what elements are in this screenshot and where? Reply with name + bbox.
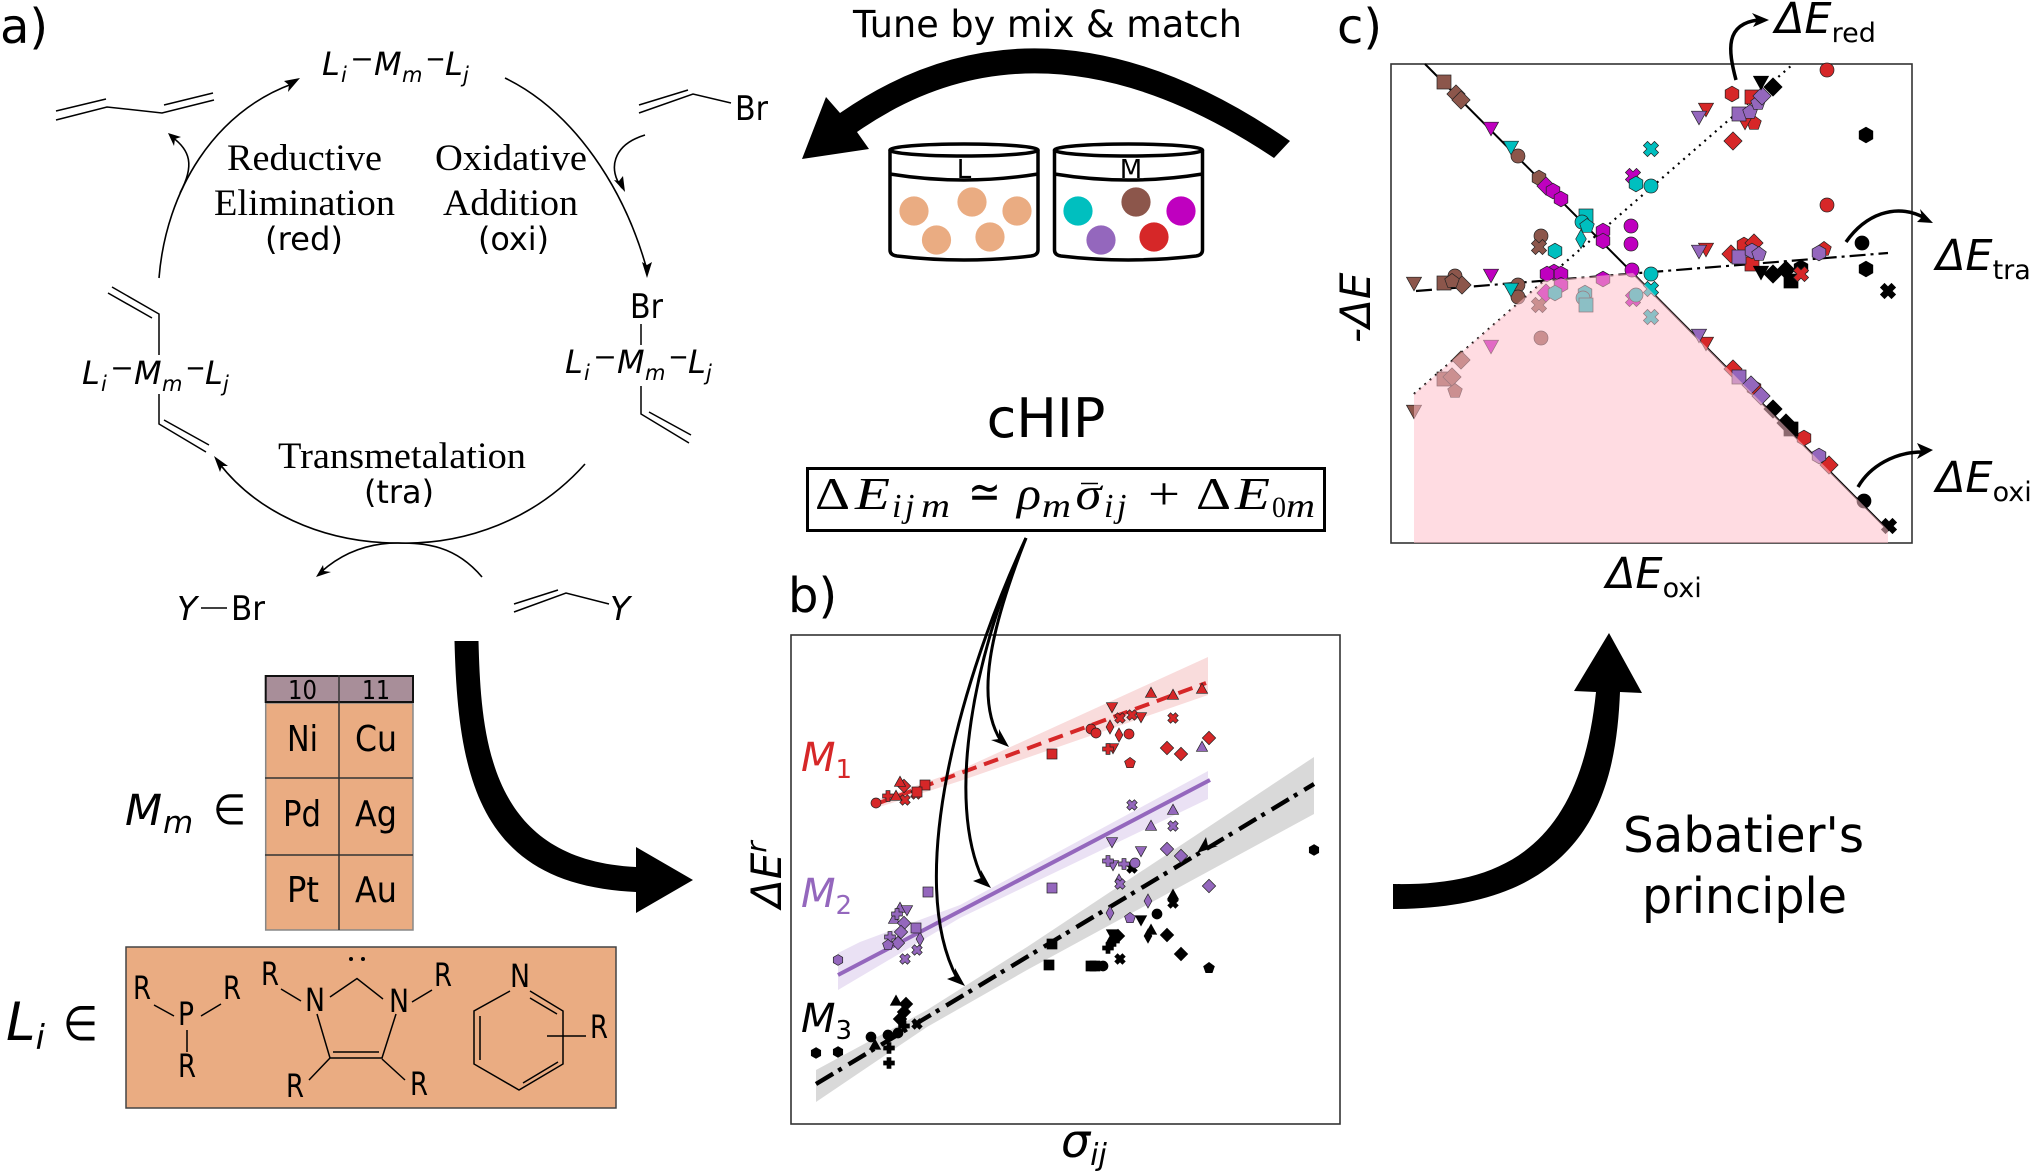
y axis label b: ΔE bbox=[742, 853, 791, 908]
label: oxidative addition: (oxi) bbox=[478, 220, 549, 258]
complex right with Br: – bbox=[669, 336, 688, 374]
ligand box bbox=[126, 947, 616, 1108]
arrows from equation to fits bbox=[936, 538, 1218, 986]
black points bbox=[1753, 76, 1900, 537]
molecule: Y-Br bbox=[177, 589, 265, 629]
label: delta E oxi right: ΔE bbox=[1933, 453, 1993, 503]
table text: Au bbox=[355, 870, 397, 911]
equation text bbox=[815, 466, 1315, 525]
periodic table of metals bbox=[265, 675, 413, 930]
equation text: Δ bbox=[815, 468, 850, 519]
equation text: ρ bbox=[1015, 468, 1041, 519]
ligand: phosphine: R bbox=[178, 1047, 196, 1085]
y axis label b: r bbox=[740, 840, 773, 853]
magenta points bbox=[1483, 122, 1644, 354]
complex top: m bbox=[402, 63, 422, 87]
ligand: phosphine: R bbox=[223, 969, 241, 1007]
scatter points M1 bbox=[871, 683, 1216, 808]
x axis label b: ij bbox=[1090, 1138, 1107, 1173]
label: reductive elimination: Elimination bbox=[214, 183, 395, 224]
arrow: butadiene release bbox=[168, 133, 189, 193]
big arrow: cycle to plot b bbox=[454, 641, 693, 913]
panel label a: a) bbox=[0, 0, 48, 55]
series label M2: 2 bbox=[836, 891, 852, 921]
complex top: i bbox=[341, 63, 347, 87]
band and fit M1 bbox=[876, 657, 1208, 808]
complex top: L bbox=[445, 45, 463, 83]
equation text: σ bbox=[1076, 468, 1104, 519]
equation text: j bbox=[901, 488, 914, 525]
metal set label: ∈ bbox=[213, 785, 246, 834]
ligand: phosphine bbox=[133, 969, 241, 1085]
ligand set label: L bbox=[6, 992, 36, 1053]
table text: Ag bbox=[355, 794, 397, 835]
panel b: scatter chart bbox=[791, 538, 1340, 1124]
equation text: m bbox=[1042, 488, 1071, 525]
complex right with Br bbox=[565, 287, 712, 443]
complex left with two vinyls: L bbox=[82, 354, 100, 392]
y axis label c: -ΔE bbox=[1331, 272, 1380, 343]
label: Sabatier's principle: Sabatier's bbox=[1623, 807, 1864, 864]
label: transmetalation: (tra) bbox=[364, 473, 434, 511]
table text: 10 bbox=[288, 676, 317, 706]
label: Sabatier's principle bbox=[1623, 807, 1864, 925]
ligand: N-heterocyclic carbene: R bbox=[261, 955, 279, 993]
title: tune by mix and match: Tune by mix & match bbox=[852, 3, 1242, 46]
complex right with Br: – bbox=[594, 336, 616, 374]
molecule: vinyl Y bbox=[514, 589, 633, 628]
table text: Cu bbox=[355, 719, 397, 760]
scatter points M3 bbox=[811, 845, 1319, 1068]
equation text: i bbox=[892, 488, 901, 525]
equation text: 0 bbox=[1272, 491, 1286, 524]
ligand: pyridine bbox=[474, 957, 608, 1090]
ligand: phosphine: R bbox=[133, 969, 151, 1007]
equation text: ≃ bbox=[968, 466, 1001, 519]
molecule: vinyl bromide bbox=[639, 89, 768, 129]
equation text: + bbox=[1148, 468, 1180, 519]
panel a: catalytic cycle bbox=[56, 38, 768, 629]
complex right with Br: M bbox=[617, 343, 645, 381]
big arrow: plot b to plot c bbox=[1393, 633, 1642, 909]
ligand: pyridine: R bbox=[590, 1008, 608, 1046]
table text: Pt bbox=[287, 870, 319, 911]
label: delta E red: red bbox=[1832, 18, 1876, 49]
equation text: m bbox=[1286, 488, 1315, 525]
stable region shading bbox=[1414, 273, 1888, 543]
panel label b: b) bbox=[788, 568, 837, 624]
x axis label c: ΔE bbox=[1603, 549, 1663, 599]
scatter points M2 bbox=[833, 741, 1216, 967]
molecule: vinyl bromide: Br bbox=[735, 89, 768, 129]
ligand: N-heterocyclic carbene: N bbox=[389, 982, 409, 1020]
series label M3: 3 bbox=[836, 1016, 852, 1046]
x axis label b: σ bbox=[1061, 1114, 1092, 1168]
series label M1: M bbox=[801, 735, 836, 781]
molecule: Y-Br: Br bbox=[231, 589, 265, 629]
series label M1: 1 bbox=[836, 755, 852, 785]
equation text: m bbox=[921, 488, 950, 525]
equation text: j bbox=[1113, 488, 1126, 525]
panel label c: c) bbox=[1337, 0, 1382, 55]
ligand: N-heterocyclic carbene: R bbox=[286, 1067, 304, 1105]
complex top: L bbox=[322, 45, 340, 83]
label: delta E tra: ΔE bbox=[1933, 231, 1993, 281]
band and fit M2 bbox=[838, 771, 1210, 990]
molecule: butadiene bbox=[56, 93, 214, 120]
label: oxidative addition bbox=[435, 138, 587, 258]
scaling lines bbox=[1414, 64, 1888, 530]
complex right with Br: L bbox=[688, 343, 706, 381]
complex left with two vinyls: j bbox=[220, 372, 229, 396]
equation text: E bbox=[854, 468, 890, 519]
complex left with two vinyls: – bbox=[111, 347, 133, 385]
metal set label bbox=[125, 785, 246, 841]
table text: Ni bbox=[287, 719, 318, 760]
big arrow: feedback to L and M jars bbox=[802, 48, 1290, 159]
metal set label: m bbox=[163, 805, 193, 841]
label: oxidative addition: Addition bbox=[443, 183, 578, 224]
complex top: j bbox=[460, 63, 469, 87]
ligand set label: ∈ bbox=[63, 996, 98, 1052]
brown points bbox=[1406, 75, 1550, 419]
ligand set label bbox=[6, 992, 98, 1058]
red cross over black points bbox=[1790, 263, 1812, 285]
x axis label c: oxi bbox=[1663, 573, 1702, 604]
complex right with Br: i bbox=[584, 361, 590, 385]
complex right with Br: Br bbox=[630, 287, 663, 327]
ligand: phosphine: P bbox=[178, 995, 194, 1033]
complex left with two vinyls: M bbox=[134, 354, 162, 392]
label: transmetalation bbox=[278, 436, 526, 511]
complex left with two vinyls bbox=[82, 287, 229, 452]
label: delta E tra: tra bbox=[1993, 255, 2031, 286]
arrow: to delta E tra bbox=[1846, 209, 1933, 242]
series label M2: M bbox=[801, 871, 836, 917]
teal points bbox=[1503, 138, 1662, 328]
heading: cHIP: cHIP bbox=[987, 387, 1105, 450]
ligand: N-heterocyclic carbene: R bbox=[434, 956, 452, 994]
label: reductive elimination bbox=[214, 138, 395, 258]
complex right with Br: m bbox=[645, 361, 665, 385]
complex left with two vinyls: m bbox=[162, 372, 182, 396]
equation text: i bbox=[1104, 488, 1113, 525]
complex left with two vinyls: – bbox=[186, 347, 205, 385]
ligand: N-heterocyclic carbene: N bbox=[305, 981, 325, 1019]
complex right with Br: L bbox=[565, 343, 583, 381]
ligand: N-heterocyclic carbene bbox=[261, 955, 452, 1105]
label: reductive elimination: Reductive bbox=[227, 138, 382, 179]
label: transmetalation: Transmetalation bbox=[278, 436, 526, 477]
arrow: to delta E oxi bbox=[1858, 443, 1933, 487]
arrow: transmetalation arc bbox=[214, 456, 585, 543]
label: delta E oxi right: oxi bbox=[1993, 477, 2032, 508]
jar: metals M: M bbox=[1120, 155, 1142, 185]
arrow: reductive elimination arc bbox=[159, 78, 300, 278]
equation box bbox=[808, 466, 1324, 530]
arrow: to delta E red bbox=[1731, 13, 1769, 80]
table text: Pd bbox=[283, 794, 321, 835]
ligand: pyridine: N bbox=[510, 957, 530, 995]
jar: ligands L bbox=[890, 144, 1038, 260]
arrow: Y-Br release bbox=[316, 543, 482, 577]
complex right with Br: j bbox=[703, 361, 712, 385]
band and fit M3 bbox=[816, 757, 1314, 1102]
purple points bbox=[1691, 87, 1826, 464]
arrow: vinyl bromide entry bbox=[614, 135, 645, 192]
red points bbox=[1698, 63, 1838, 474]
equation text: Δ bbox=[1196, 468, 1231, 519]
arrow: oxidative addition arc bbox=[505, 78, 652, 278]
label: oxidative addition: Oxidative bbox=[435, 138, 587, 179]
label: Sabatier's principle: principle bbox=[1642, 868, 1847, 925]
complex top: M bbox=[374, 45, 402, 83]
table text bbox=[283, 676, 397, 911]
jar: ligands L: L bbox=[957, 155, 972, 185]
molecule: vinyl Y: Y bbox=[610, 589, 633, 628]
table text: 11 bbox=[362, 676, 390, 706]
ligand: N-heterocyclic carbene: R bbox=[410, 1065, 428, 1103]
ligand set label: i bbox=[36, 1018, 46, 1058]
complex top: – bbox=[351, 38, 373, 76]
label: reductive elimination: (red) bbox=[265, 220, 343, 258]
equation text: E bbox=[1234, 468, 1270, 519]
complex left with two vinyls: L bbox=[205, 354, 223, 392]
complex left with two vinyls: i bbox=[101, 372, 107, 396]
series label M3: M bbox=[801, 996, 836, 1042]
complex top: – bbox=[426, 38, 445, 76]
molecule: Y-Br: Y bbox=[177, 589, 200, 628]
metal set label: M bbox=[125, 786, 162, 836]
jar: metals M bbox=[1054, 144, 1202, 260]
panel c: volcano plot bbox=[1391, 63, 1912, 543]
